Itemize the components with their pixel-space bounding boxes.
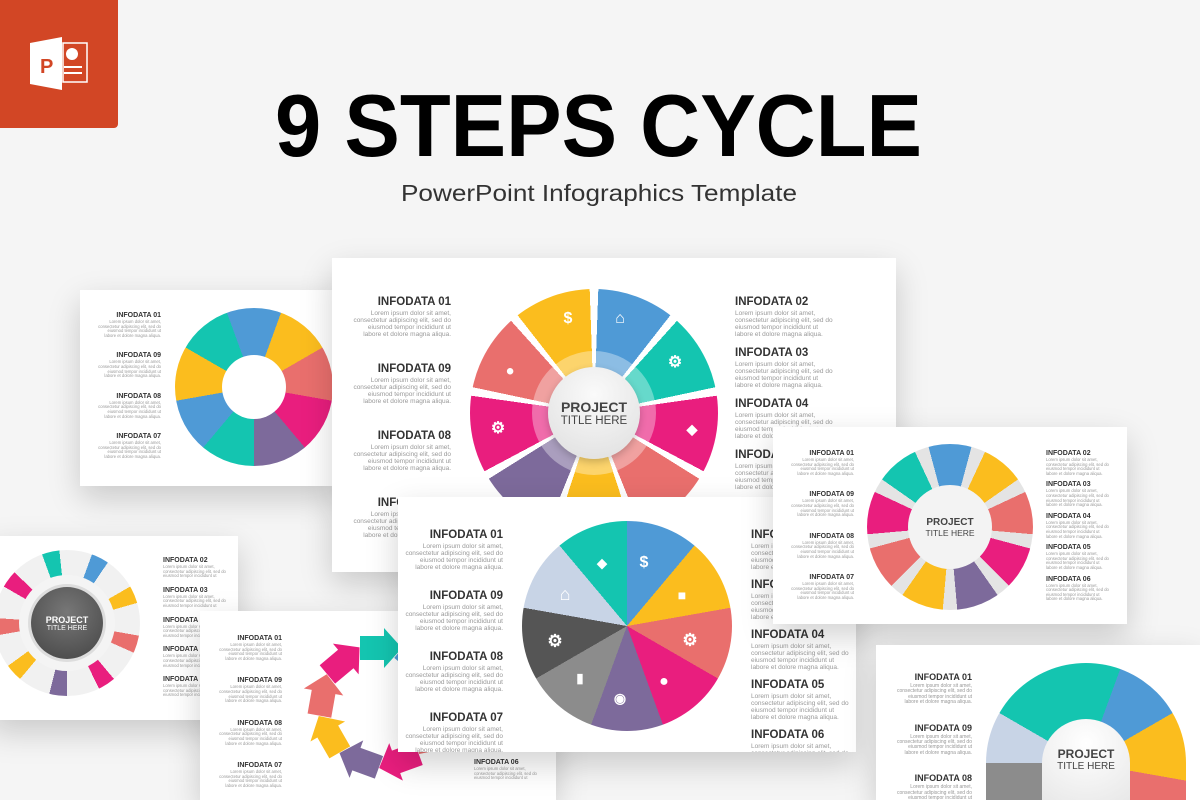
text: left column: eiusmod tempor incididunt ut [420, 557, 503, 564]
text: left column: Lorem ipsum dolor sit amet, [109, 440, 161, 445]
pie chart: ⌂ [560, 584, 570, 604]
text: left column: Lorem ipsum dolor sit amet, [910, 784, 972, 790]
text: right column: eiusmod tempor incididunt ut [474, 775, 528, 780]
text: left column: eiusmod tempor incididunt ut [368, 525, 451, 532]
text: right column: INFODATA 02 [735, 296, 808, 308]
text: left column: labore et dolore magna aliqua. [225, 741, 282, 746]
text: right column: Lorem ipsum dolor sit amet, [163, 653, 215, 658]
text: right column: INFODATA 06 [751, 729, 824, 741]
text: left column: consectetur adipiscing elit, sed do [98, 364, 161, 369]
text: left column: eiusmod tempor incididunt ut [420, 618, 503, 625]
text: right column: consectetur adipiscing elit, sed do [735, 317, 833, 324]
text: left column: consectetur adipiscing elit, sed do [897, 739, 972, 745]
text: left column: labore et dolore magna aliqua. [904, 750, 972, 756]
text: right column: eiusmod tempor incididunt ut [163, 692, 217, 697]
text: left column: Lorem ipsum dolor sit amet, [423, 726, 503, 733]
text: left column: eiusmod tempor incididunt ut [368, 391, 451, 398]
text: right column: Lorem ipsum dolor sit amet, [163, 564, 215, 569]
slide: bottom-right swirl [876, 645, 1200, 800]
slide: left donut [80, 290, 340, 486]
text: left column: labore et dolore magna aliqua. [797, 471, 854, 476]
text: left column: Lorem ipsum dolor sit amet, [230, 684, 282, 689]
text: right column: Lorem ipsum dolor sit amet, [163, 594, 215, 599]
ring chart: petals: ● [505, 362, 515, 380]
text: left column: consectetur adipiscing elit, sed do [98, 404, 161, 409]
slide: pie chart [398, 497, 856, 752]
text: right column: eiusmod tempor incididunt ut [751, 607, 834, 614]
text: right column: INFODATA 05 [1046, 544, 1091, 551]
text: right column: labore et dolore magna aliqua. [735, 382, 823, 389]
slide: right ring [773, 427, 1127, 624]
text: right column: labore et dolore magna aliqua. [751, 714, 839, 721]
text: left column [219, 635, 282, 788]
text: left column: INFODATA 01 [809, 450, 854, 457]
text: right column: eiusmod tempor incididunt ut [735, 426, 818, 433]
ring chart [0, 550, 140, 696]
text: right column: labore et dolore magna aliqua. [1046, 534, 1103, 539]
text: right column [1046, 450, 1109, 601]
text: right column: INFODATA 03 [751, 579, 824, 591]
text: right column: INFODATA 02 [163, 557, 208, 564]
text: left column: Lorem ipsum dolor sit amet, [230, 727, 282, 732]
text: left column: consectetur adipiscing elit, sed do [405, 550, 503, 557]
pie chart: ◆ [597, 556, 607, 570]
text: left column: consectetur adipiscing elit, sed do [791, 544, 854, 549]
center: project title: TITLE HERE [561, 415, 627, 427]
text: left column: labore et dolore magna aliqua. [363, 331, 451, 338]
text: right column: consectetur adipiscing elit, sed do [751, 700, 849, 707]
text: left column: consectetur adipiscing elit, sed do [405, 733, 503, 740]
text: left column: consectetur adipiscing elit, sed do [219, 731, 282, 736]
text: left column: Lorem ipsum dolor sit amet, [802, 498, 854, 503]
text: right column: INFODATA 04 [1046, 513, 1091, 520]
text: right column: consectetur adipiscing elit, sed do [735, 368, 833, 375]
text: left column: Lorem ipsum dolor sit amet, [371, 310, 451, 317]
text: left column: eiusmod tempor incididunt ut [800, 590, 854, 595]
text: right column: INFODATA 03 [163, 587, 208, 594]
text: left column: eiusmod tempor incididunt ut [107, 409, 161, 414]
text: right column: consectetur adipiscing elit, sed do [163, 688, 226, 693]
text: right column: eiusmod tempor incididunt ut [1046, 466, 1100, 471]
text: right column: Lorem ipsum dolor sit amet, [735, 361, 815, 368]
text: left column: labore et dolore magna aliqua. [797, 554, 854, 559]
text: right column: Lorem ipsum dolor sit amet, [1046, 582, 1098, 588]
text: left column: Lorem ipsum dolor sit amet, [109, 319, 161, 324]
pie chart: ◉ [614, 690, 626, 706]
text: left column: eiusmod tempor incididunt ut [420, 740, 503, 747]
text: right column: Lorem ipsum dolor sit amet, [735, 463, 815, 470]
text: left column: eiusmod tempor incididunt ut [228, 736, 282, 741]
text: right column: Lorem ipsum dolor sit amet, [1046, 551, 1098, 556]
ring chart: petals [470, 289, 718, 537]
text: right column: eiusmod tempor incididunt ut [1046, 592, 1100, 597]
text: right column: consectetur adipiscing elit, sed do [735, 419, 833, 426]
text: right column: eiusmod tempor incididunt ut [163, 573, 217, 578]
text: right column: consectetur adipiscing elit, sed do [751, 550, 849, 557]
text: right column: consectetur adipiscing elit, sed do [1046, 493, 1109, 498]
pie chart: ⚙ [682, 630, 698, 650]
logo: powerpoint [0, 0, 118, 128]
text: left column: INFODATA 08 [116, 393, 161, 400]
text: left column: INFODATA 07 [116, 433, 161, 440]
text: left column: Lorem ipsum dolor sit amet, [371, 511, 451, 518]
text: right column: eiusmod tempor incididunt ut [735, 375, 818, 382]
text: left column: INFODATA 09 [809, 491, 854, 498]
text: right column: INFODATA 02 [1046, 450, 1091, 457]
text: left column: INFODATA 01 [378, 296, 451, 308]
text: right column: labore et dolore magna aliqua. [735, 484, 823, 491]
text: right column: Lorem ipsum dolor sit amet, [751, 693, 831, 700]
text: left column: eiusmod tempor incididunt ut [908, 744, 972, 750]
text: left column: INFODATA 08 [430, 651, 503, 663]
text: left column: INFODATA 01 [430, 529, 503, 541]
text: left column: eiusmod tempor incididunt ut [107, 369, 161, 374]
center: project title: PROJECT [1058, 747, 1114, 761]
text: left column: eiusmod tempor incididunt ut [800, 508, 854, 513]
text: right column: consectetur adipiscing elit, sed do [1046, 587, 1109, 592]
text: right column: labore et dolore magna aliqua. [1046, 596, 1103, 601]
text: left column: Lorem ipsum dolor sit amet, [802, 457, 854, 462]
text: left column: Lorem ipsum dolor sit amet, [423, 543, 503, 550]
text: left column: consectetur adipiscing elit, sed do [897, 688, 972, 694]
text: left column: Lorem ipsum dolor sit amet, [230, 769, 282, 774]
ring chart: petals: ◆ [687, 421, 697, 437]
text: left column: eiusmod tempor incididunt ut [800, 466, 854, 471]
pie chart: ⚙ [547, 632, 563, 650]
text: left column: labore et dolore magna aliqua. [415, 625, 503, 632]
text: left column: eiusmod tempor incididunt ut [107, 449, 161, 454]
text: right column: labore et dolore magna aliqua. [1046, 471, 1103, 476]
ring chart: petals: ⚙ [668, 354, 682, 371]
text: right column: consectetur adipiscing elit, sed do [163, 598, 226, 603]
text: right column: consectetur adipiscing elit, sed do [163, 628, 226, 633]
text: right column: Lorem ipsum dolor sit amet, [735, 412, 815, 419]
text: left column: consectetur adipiscing elit, sed do [98, 445, 161, 450]
text: left column: eiusmod tempor incididunt ut [908, 694, 972, 700]
text: right column: consectetur adipiscing elit, sed do [1046, 462, 1109, 467]
text: left column [98, 312, 161, 459]
text: left column: consectetur adipiscing elit, sed do [353, 518, 451, 525]
text: right column: consectetur adipiscing elit, sed do [735, 470, 833, 477]
text: left column: consectetur adipiscing elit, sed do [219, 774, 282, 779]
text: right column: consectetur adipiscing elit, sed do [1046, 524, 1109, 529]
text: right column: INFODATA 03 [1046, 481, 1091, 488]
pie chart: ■ [678, 587, 686, 603]
text: left column: eiusmod tempor incididunt ut [107, 328, 161, 333]
text: left column: Lorem ipsum dolor sit amet, [371, 377, 451, 384]
text: left column: eiusmod tempor incididunt ut [228, 778, 282, 783]
text: left column: consectetur adipiscing elit, sed do [791, 462, 854, 467]
text: right column: Lorem ipsum dolor sit amet, [735, 310, 815, 317]
text: left column: labore et dolore magna aliqua. [797, 595, 854, 600]
text: left column [897, 672, 972, 800]
text: left column: labore et dolore magna aliqua. [363, 532, 451, 539]
text: left column: Lorem ipsum dolor sit amet, [109, 359, 161, 364]
slide: bottom-left ring [0, 536, 238, 720]
text: right column: consectetur adipiscing elit, sed do [163, 658, 226, 663]
text: right column: labore et dolore magna aliqua. [735, 433, 823, 440]
text: left column: eiusmod tempor incididunt ut [228, 694, 282, 699]
text: right column: labore et dolore magna aliqua. [735, 331, 823, 338]
text: right column: labore et dolore magna aliqua. [1046, 565, 1103, 570]
text: right column: eiusmod tempor incididunt ut [1046, 560, 1100, 565]
text: right column: INFODATA 06 [163, 676, 208, 683]
text: right column: INFODATA 05 [163, 646, 208, 653]
text: left column: eiusmod tempor incididunt ut [368, 458, 451, 465]
text: left column [405, 529, 503, 752]
text: left column: labore et dolore magna aliqua. [904, 699, 972, 705]
text: left column: consectetur adipiscing elit, sed do [353, 451, 451, 458]
text: left column: labore et dolore magna aliqua. [104, 414, 161, 419]
text: right column: INFODATA 04 [751, 629, 824, 641]
center: project title: PROJECT [561, 399, 627, 415]
arrows cycle [304, 628, 428, 781]
text: left column: Lorem ipsum dolor sit amet, [230, 642, 282, 647]
donut chart [175, 308, 333, 466]
text: left column: consectetur adipiscing elit, sed do [405, 611, 503, 618]
text: right column: labore et dolore magna aliqua. [751, 664, 839, 671]
text: left column: INFODATA 08 [237, 720, 282, 727]
text: right column: consectetur adipiscing elit, sed do [474, 771, 537, 776]
text: right column: eiusmod tempor incididunt ut [735, 477, 818, 484]
text: left column: labore et dolore magna aliqua. [225, 698, 282, 703]
text: left column: INFODATA 09 [378, 363, 451, 375]
text: right column: Lorem ipsum dolor sit amet, [751, 593, 831, 600]
text: left column: eiusmod tempor incididunt ut [368, 324, 451, 331]
text: right column: eiusmod tempor incididunt ut [163, 633, 217, 638]
center: project title [908, 485, 992, 569]
pie chart [522, 521, 732, 731]
center: project title: TITLE HERE [1057, 761, 1115, 772]
text: right column [751, 529, 849, 752]
text: left column: consectetur adipiscing elit, sed do [791, 503, 854, 508]
text: left column: consectetur adipiscing elit, sed do [219, 647, 282, 652]
text: right column: INFODATA 05 [751, 679, 824, 691]
text: right column: consectetur adipiscing elit, sed do [751, 600, 849, 607]
text: right column: INFODATA 06 [1046, 576, 1091, 582]
center: project title [548, 367, 640, 459]
text: left column: INFODATA 09 [430, 590, 503, 602]
center: project title: PROJECT [926, 516, 974, 528]
center: project title: PROJECT [46, 614, 88, 624]
ring chart: petals: ⌂ [615, 310, 625, 327]
text: left column: labore et dolore magna aliqua. [104, 333, 161, 338]
text: left column: eiusmod tempor incididunt ut [800, 549, 854, 554]
text: left column: INFODATA 01 [237, 635, 282, 642]
text: right column: eiusmod tempor incididunt ut [1046, 498, 1100, 503]
text: left column: INFODATA 07 [237, 762, 282, 769]
text: left column: INFODATA 07 [378, 497, 451, 509]
text: right column: labore et dolore magna aliqua. [1046, 502, 1103, 507]
text: left column: INFODATA 01 [915, 672, 972, 682]
text: left column: INFODATA 07 [430, 712, 503, 724]
text: right column: Lorem ipsum dolor sit amet, [1046, 520, 1098, 525]
icons: $ [640, 554, 648, 571]
text: left column: consectetur adipiscing elit, sed do [98, 324, 161, 329]
text: right column: labore et dolore magna aliqua. [751, 564, 839, 571]
text: left column: eiusmod tempor incididunt ut [228, 651, 282, 656]
text: right column: eiusmod tempor incididunt ut [163, 603, 217, 608]
text: right column: INFODATA 02 [751, 529, 824, 541]
text: right column: eiusmod tempor incididunt ut [751, 707, 834, 714]
center: project title: TITLE HERE [47, 624, 87, 632]
text: left column: INFODATA 09 [237, 677, 282, 684]
text: left column: labore et dolore magna aliqua. [225, 783, 282, 788]
text: right column: Lorem ipsum dolor sit amet, [751, 643, 831, 650]
text: right column: Lorem ipsum dolor sit amet, [474, 766, 526, 771]
icons: $ [564, 310, 572, 327]
text: left column: INFODATA 01 [116, 312, 161, 319]
text: right column: INFODATA 03 [735, 347, 808, 359]
text: left column: Lorem ipsum dolor sit amet, [802, 581, 854, 586]
text: right column: Lorem ipsum dolor sit amet, [1046, 488, 1098, 493]
text: right column: consectetur adipiscing elit, sed do [163, 569, 226, 574]
text: left column [791, 450, 854, 600]
text: left column: INFODATA 08 [378, 430, 451, 442]
center: project title [31, 587, 103, 659]
text: right column: INFODATA 06 [474, 759, 519, 766]
text: left column: consectetur adipiscing elit, sed do [405, 672, 503, 679]
text: left column: Lorem ipsum dolor sit amet, [423, 665, 503, 672]
center: project title: TITLE HERE [925, 528, 975, 538]
pie chart: ● [659, 673, 669, 690]
text: right column: Lorem ipsum dolor sit amet, [163, 683, 215, 688]
text: left column: labore et dolore magna aliqua. [363, 398, 451, 405]
text: right column: Lorem ipsum dolor sit amet, [751, 543, 831, 550]
text: right column: INFODATA 04 [735, 398, 808, 410]
slide: bottom arrows cycle [200, 611, 556, 800]
text: right column [735, 296, 833, 491]
text: left column: labore et dolore magna aliqua. [104, 454, 161, 459]
logo: powerpoint: P [40, 56, 53, 78]
text: left column: consectetur adipiscing elit, sed do [897, 790, 972, 796]
text: left column: labore et dolore magna aliqua. [415, 686, 503, 693]
text: right column: Lorem ipsum dolor sit amet, [1046, 457, 1098, 462]
text: right column: consectetur adipiscing elit, sed do [751, 650, 849, 657]
text: left column: INFODATA 08 [915, 773, 972, 783]
text: left column: consectetur adipiscing elit, sed do [791, 586, 854, 591]
text: left column: INFODATA 07 [809, 574, 854, 581]
ring chart [867, 444, 1033, 610]
center: project title [1042, 719, 1130, 800]
text: left column: Lorem ipsum dolor sit amet, [910, 683, 972, 689]
text: left column: eiusmod tempor incididunt ut [420, 679, 503, 686]
text: right column: eiusmod tempor incididunt ut [1046, 529, 1100, 534]
text: left column: Lorem ipsum dolor sit amet, [371, 444, 451, 451]
text: right column: INFODATA 04 [163, 617, 208, 624]
text: right column: eiusmod tempor incididunt ut [751, 557, 834, 564]
text: right column: INFODATA 05 [735, 449, 808, 461]
text: left column [353, 296, 451, 539]
pie chart: ▮ [576, 670, 584, 686]
text: left column: INFODATA 09 [116, 352, 161, 359]
text: left column: labore et dolore magna aliqua. [225, 656, 282, 661]
swirl chart [986, 663, 1186, 800]
text: right column: Lorem ipsum dolor sit amet, [163, 624, 215, 629]
text: left column: Lorem ipsum dolor sit amet, [910, 734, 972, 740]
text: left column: INFODATA 08 [809, 533, 854, 540]
text: right column: eiusmod tempor incididunt ut [163, 663, 217, 668]
text: right column: eiusmod tempor incididunt ut [735, 324, 818, 331]
text: left column: Lorem ipsum dolor sit amet, [802, 540, 854, 545]
text: left column: Lorem ipsum dolor sit amet, [109, 400, 161, 405]
ring chart: petals: ⚙ [491, 420, 505, 437]
text: right column: labore et dolore magna aliqua. [751, 614, 839, 621]
subtitle: PowerPoint Infographics Template [401, 180, 797, 206]
text: left column: Lorem ipsum dolor sit amet, [423, 604, 503, 611]
text: right column: eiusmod tempor incididunt ut [751, 657, 834, 664]
text: left column: consectetur adipiscing elit, sed do [219, 689, 282, 694]
text: left column: labore et dolore magna aliqua. [363, 465, 451, 472]
text: left column: labore et dolore magna aliqua. [415, 564, 503, 571]
text: right column [163, 557, 226, 697]
text: left column: labore et dolore magna aliqua. [797, 512, 854, 517]
slide: center big ring [332, 258, 896, 572]
text: right column [474, 759, 537, 780]
text: right column: Lorem ipsum dolor sit amet, [751, 743, 831, 750]
text: right column: consectetur adipiscing elit, sed do [1046, 556, 1109, 561]
text: left column: INFODATA 09 [915, 723, 972, 733]
text: left column: consectetur adipiscing elit, sed do [353, 384, 451, 391]
text: left column: consectetur adipiscing elit, sed do [353, 317, 451, 324]
text: left column: labore et dolore magna aliqua. [104, 373, 161, 378]
